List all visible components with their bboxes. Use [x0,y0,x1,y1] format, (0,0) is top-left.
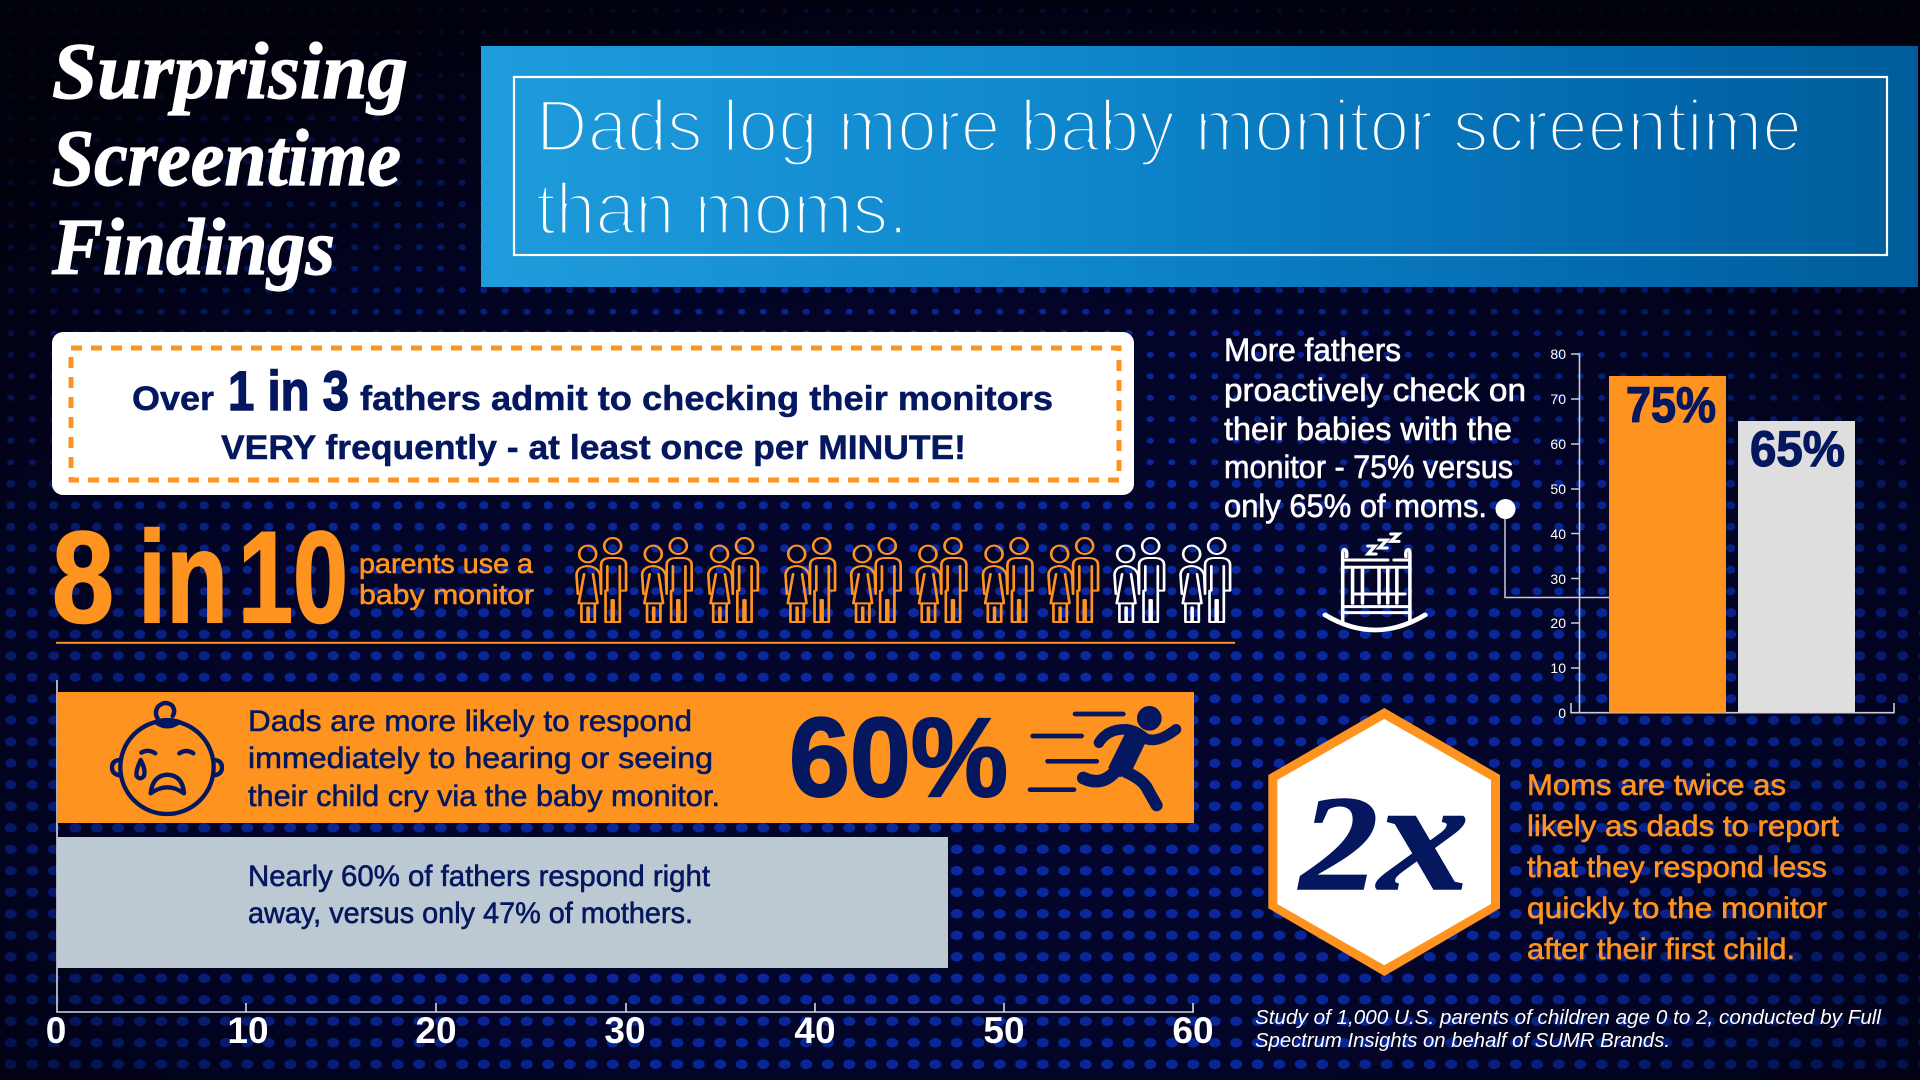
title: Surprising [52,28,408,116]
text: moms twice as likely: after their first child. [1527,933,1795,966]
stat caption: baby monitor [359,579,534,610]
axis labels: 60 [1172,1010,1214,1051]
stat: 60%: 60% [789,695,1008,820]
icon: crying baby [112,703,222,814]
footnote: Study of 1,000 U.S. parents of children age 0 to 2, conducted by Full [1255,1007,1882,1029]
badge value: 2x [1298,749,1469,924]
axis labels: 0 [46,1010,66,1051]
bar: fathers 75 [1609,376,1726,713]
callout text: 1 in 3 [228,359,349,422]
stat caption [359,548,534,610]
bar: moms [57,837,948,968]
dads bar text: immediately to hearing or seeing [248,742,713,775]
dads bar text: Dads are more likely to respond [248,705,692,738]
axis labels: 20 [415,1010,457,1051]
text: moms twice as likely: likely as dads to report [1527,810,1840,843]
axis labels: 60 [1550,436,1566,452]
callout text [132,359,1053,467]
axis labels [46,1010,1214,1051]
moms bar text: Nearly 60% of fathers respond right [248,860,711,893]
axis labels: 30 [1550,571,1566,587]
badge: 2x hexagon [1268,708,1500,976]
axis labels: 70 [1550,391,1566,407]
axis [57,680,1194,1012]
icon: orange parent pairs [577,538,1098,622]
icon: running figure [1030,706,1176,805]
icon: white parent pairs [1115,538,1230,622]
text: fathers check more: only 65% of moms. [1224,488,1487,524]
axis labels: 50 [983,1010,1025,1051]
icon: sleeping crib [1325,534,1425,630]
moms bar text: away, versus only 47% of mothers. [248,897,693,930]
axis labels: 50 [1550,481,1566,497]
connector: dot to bar [1496,499,1609,598]
text: moms twice as likely: Moms are twice as [1527,769,1786,802]
dads bar text: their child cry via the baby monitor. [248,780,720,813]
axis labels: 30 [604,1010,646,1051]
text: moms twice as likely: that they respond less [1527,851,1827,884]
axis labels: 20 [1550,615,1566,631]
axis labels: 40 [1550,526,1566,542]
icons: row of ten parent pairs, eight highlighted [577,538,1230,622]
text: fathers check more: proactively check on [1224,372,1526,408]
axis labels: 10 [1550,660,1566,676]
callout text: Over [132,380,214,418]
title [51,28,408,292]
footnote: Spectrum Insights on behalf of SUMR Brands. [1255,1030,1670,1052]
axis [1571,354,1894,713]
value: 75%: 75% [1626,377,1716,433]
stat caption: parents use a [359,548,533,579]
stat: 8 in 10 parents [52,504,534,650]
title: Screentime [52,115,401,203]
panel: 1 in 3 fathers callout [52,332,1134,495]
text: fathers check more: More fathers [1224,332,1401,368]
callout text: fathers admit to checking their monitors [360,380,1053,418]
moms bar text [248,860,711,930]
text: fathers check more: their babies with the [1224,411,1512,447]
axis labels [1550,346,1566,721]
title: Findings [51,204,335,292]
chart: response bars [46,680,1214,1051]
text: fathers check more [1224,332,1526,524]
headline text: Dads log more baby monitor screentime [536,86,1802,167]
bar: mothers 65 [1738,421,1855,713]
axis labels: 40 [794,1010,836,1051]
stat: 8 in 10 parents: in [138,504,228,650]
callout text: VERY frequently - at least once per MINUTE! [221,429,966,467]
axis labels: 0 [1558,705,1566,721]
axis labels: 10 [227,1010,269,1051]
headline text: than moms. [536,169,908,250]
dads bar text [248,705,720,813]
text: fathers check more: monitor - 75% versus [1224,449,1513,485]
panel: headline banner [481,46,1918,287]
axis labels: 80 [1550,346,1566,362]
chart: fathers vs mothers column chart [1550,346,1894,721]
footnote [1255,1007,1882,1052]
headline text [536,86,1802,250]
text: moms twice as likely [1527,769,1840,966]
stat: 8 in 10 parents: 8 [52,504,114,650]
bar: dads [57,692,1194,823]
text: moms twice as likely: quickly to the monitor [1527,892,1827,925]
stat: 8 in 10 parents: 10 [238,504,348,650]
value: 65%: 65% [1750,421,1845,477]
